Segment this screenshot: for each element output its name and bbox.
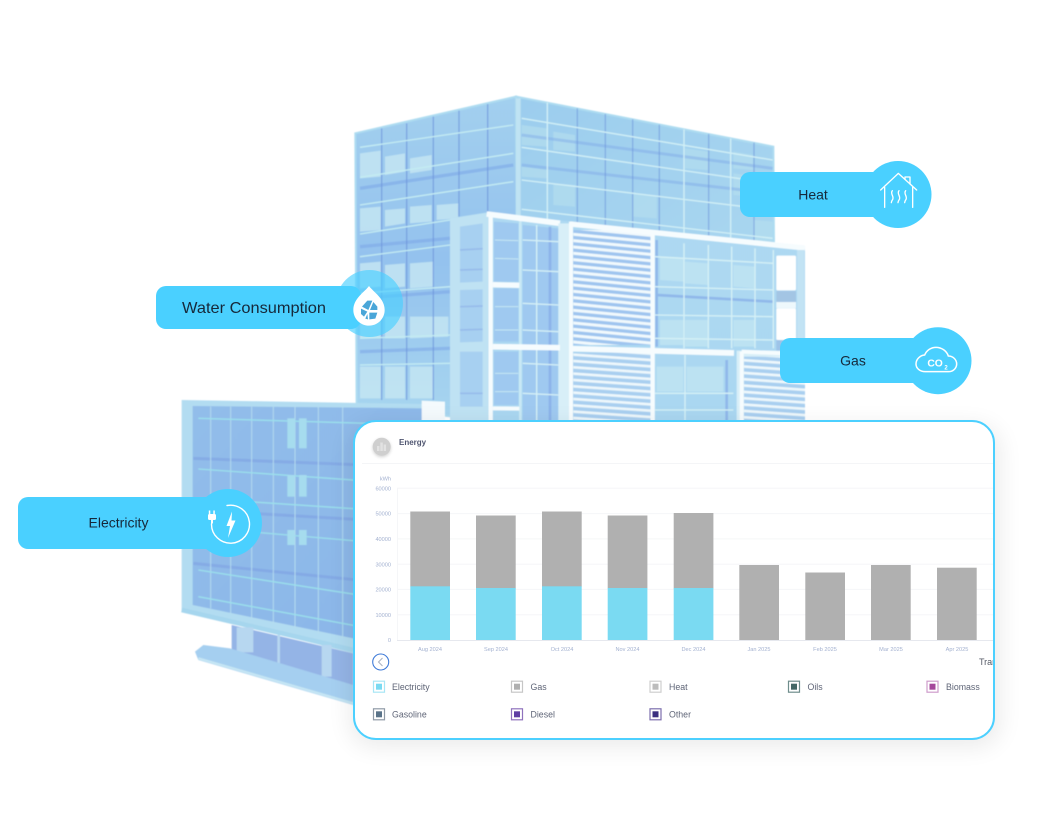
callout: water consumption (156, 270, 403, 337)
bar chart: Sep 2024 (484, 647, 508, 653)
callout: electricity: Electricity (89, 514, 148, 530)
card header (362, 438, 994, 464)
bar chart: Nov 2024 (616, 647, 639, 653)
bar chart: Mar 2025 (879, 647, 903, 653)
legend (374, 681, 980, 720)
legend: Gasoline (392, 710, 427, 720)
bar chart: 0 (388, 638, 391, 644)
bar chart: 60000 (375, 486, 391, 492)
bar chart: Dec 2024 (682, 647, 705, 653)
bar chart: Jan 2025 (747, 647, 771, 653)
bar chart: Aug 2024 (418, 647, 442, 653)
left facade (355, 97, 518, 423)
back button (373, 654, 389, 670)
bar chart: Feb 2025 (813, 647, 837, 653)
legend: Biomass (946, 682, 980, 692)
icon: water drop (353, 286, 385, 326)
panel: energy chart card (354, 421, 1018, 739)
ground floor and canopy (195, 625, 353, 705)
glazing right of louvres (657, 257, 755, 392)
truncated label: Transport (979, 657, 1018, 667)
legend: Oils (808, 682, 823, 692)
bar chart: 30000 (375, 562, 391, 568)
bar chart: 10000 (375, 613, 391, 619)
icon: CO2 cloud: 2 (944, 365, 948, 371)
soft shadow under card (350, 425, 1000, 747)
bar chart: Apr 2025 (946, 647, 968, 653)
bar chart: Oct 2024 (551, 647, 573, 653)
white frames (487, 214, 805, 423)
callout: heat: Heat (798, 186, 828, 202)
bar chart: 40000 (375, 537, 391, 543)
callout: heat (740, 161, 932, 228)
legend: Diesel (530, 710, 555, 720)
icon: CO2 cloud: CO (927, 359, 943, 370)
callout: water consumption: Water Consumption (182, 300, 326, 317)
right facade (516, 97, 774, 250)
upper glass facade (182, 400, 445, 690)
icon: CO2 cloud (916, 347, 957, 372)
bar chart (375, 476, 994, 653)
bar chart: kWh (380, 476, 391, 482)
lower right wing (737, 351, 805, 423)
bar chart: 20000 (375, 588, 391, 594)
main glass building (355, 97, 805, 423)
card header: Energy (399, 438, 427, 447)
legend: Heat (669, 682, 688, 692)
legend: Gas (530, 682, 547, 692)
side opening (776, 256, 796, 352)
callout: gas (780, 327, 972, 394)
icon: house with heat (881, 173, 917, 207)
pale side column (450, 213, 488, 423)
bar chart: 50000 (375, 512, 391, 518)
louvre panels (573, 230, 651, 345)
icon: plug and bolt (208, 505, 249, 543)
legend: Electricity (392, 682, 430, 692)
lower left building (182, 400, 445, 705)
callout: gas: Gas (840, 352, 866, 368)
callout: electricity (18, 489, 262, 557)
legend: Other (669, 710, 691, 720)
front block (450, 212, 805, 423)
